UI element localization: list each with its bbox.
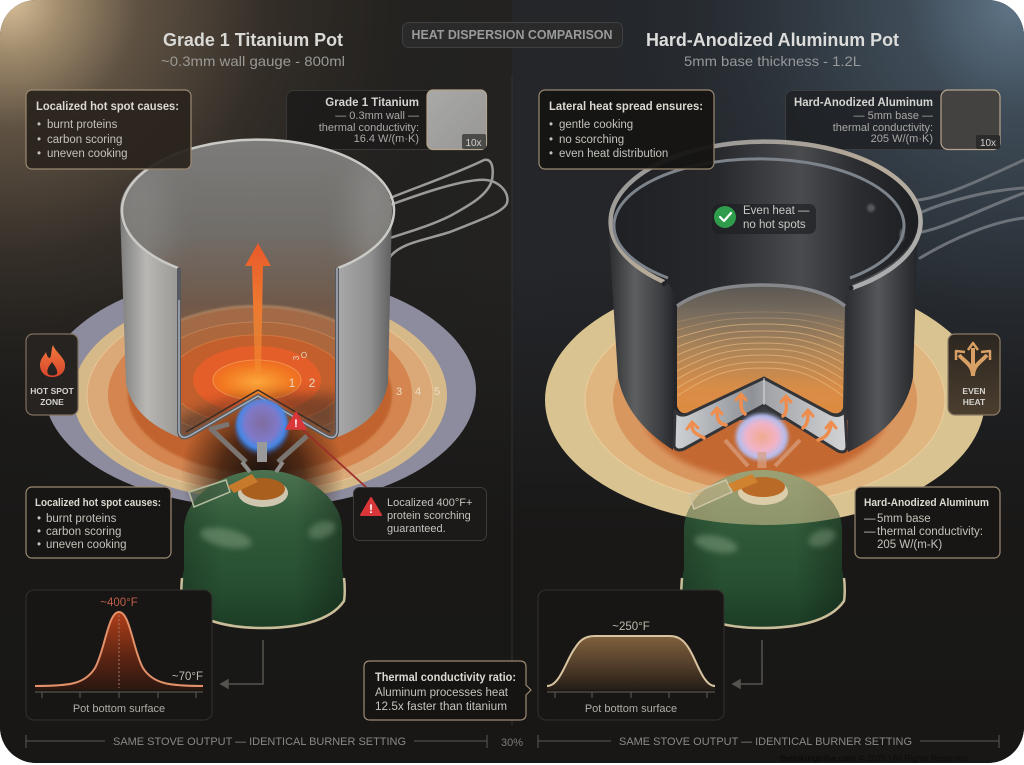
callout: conductivity ratio: Aluminum processes heat [375,687,509,699]
even-heat note: Even heat — [743,205,810,217]
callout: aluminum specs: — [864,513,876,525]
material card: titanium: 10x [465,138,482,149]
pot walls [608,220,675,450]
callout: localized hot spot top: uneven cooking [47,148,128,160]
callout: localized hot spot top: • [37,148,41,160]
chart: aluminum temperature profile [538,590,724,720]
callout: aluminum specs [855,487,1000,558]
callout: aluminum specs: 5mm base [877,513,931,525]
badge: even heat [948,334,1000,415]
canister body [681,470,845,628]
icon: warning triangle [361,498,381,515]
pot: titanium [110,135,507,454]
pot handle [918,160,1024,258]
callout: lateral heat spread: even heat distribution [559,148,668,160]
even-heat note [712,204,816,234]
badge: hot spot zone: ZONE [40,397,64,407]
stove legs [211,424,307,462]
stove and canister: titanium [181,399,345,628]
callout: lateral heat spread: • [549,134,553,146]
pot interior [120,140,392,436]
footer: same stove output right: SAME STOVE OUTPUT — IDENTICAL BURNER SETTING [619,736,912,748]
callout: localized hot spot top: • [37,119,41,131]
callout: conductivity ratio: Thermal conductivity ratio: [375,672,516,684]
ring numbers: 1 [289,376,296,390]
flame [734,412,790,462]
callout: localized hot spot top: • [37,134,41,146]
ring numbers: 2 [309,376,316,390]
even-heat note: no hot spots [743,219,806,231]
title: aluminum: Hard-Anodized Aluminum Pot [646,30,899,50]
chart: aluminum temperature profile: ~250°F [612,621,650,633]
callout: aluminum specs: Hard-Anodized Aluminum [864,497,989,509]
callout: scorching warning [354,488,486,540]
translucent halo over canister [686,470,840,525]
title: aluminum [646,30,899,69]
icon: flame [40,345,65,377]
heat arrow [245,243,271,372]
footer: same stove output left: SAME STOVE OUTPUT — IDENTICAL BURNER SETTING [113,736,406,748]
lateral heat arrows [687,394,836,440]
pot section interior with heat lines [675,283,847,420]
heat halo: aluminum [545,275,985,525]
chart: titanium temperature profile [26,590,212,720]
ring numbers outside pot [396,386,440,398]
chart: titanium temperature profile: Pot bottom surface [73,703,165,715]
footer: percentage: 30% [501,737,523,749]
material card: aluminum: 205 W/(m·K) [871,133,933,145]
callout: localized hot spot lower: uneven cooking [46,539,127,551]
rim and base section [122,140,394,268]
ring numbers: 3 [292,355,301,360]
callout: lateral heat spread: no scorching [559,134,624,146]
callout: aluminum specs: — [864,526,876,538]
callout: localized hot spot top [26,90,191,169]
connector arrow: titanium [221,640,263,688]
chart: titanium temperature profile: ~400°F [100,597,138,609]
material card: aluminum: — 5mm base — [854,110,933,122]
callout: lateral heat spread: gentle cooking [559,119,633,131]
pot: aluminum [608,140,1024,452]
callout: aluminum specs: thermal conductivity: [877,526,983,538]
material card: aluminum: 10x [980,138,996,149]
badge: hot spot zone [26,334,78,415]
callout: localized hot spot lower [26,487,171,558]
rim [611,142,921,288]
callout: scorching warning: protein scorching [387,510,471,522]
material card: aluminum: thermal conductivity: [833,122,933,134]
heading badge: HEAT DISPERSION COMPARISON [412,28,612,42]
badge: hot spot zone: HOT SPOT [30,386,75,396]
callout: scorching warning: ! [369,502,373,516]
pot walls [120,210,178,437]
callout: localized hot spot lower: carbon scoring [46,526,121,538]
callout: lateral heat spread: • [549,119,553,131]
thick base section [674,378,847,452]
callout: localized hot spot top: burnt proteins [47,119,118,131]
ring numbers [289,351,316,390]
callout: conductivity ratio [364,661,531,720]
callout: localized hot spot lower: Localized hot spot causes: [35,497,161,509]
material card: titanium: — 0.3mm wall — [335,110,419,122]
callout: lateral heat spread [539,90,714,169]
ring numbers: O [301,351,307,360]
callout: localized hot spot top: carbon scoring [47,134,122,146]
callout: localized hot spot lower: • [37,539,41,551]
connector arrow: aluminum [733,640,762,688]
material card: aluminum [786,90,1000,150]
title: titanium: Grade 1 Titanium Pot [163,30,343,50]
pot interior back wall [608,140,918,300]
material card: titanium [286,90,486,150]
canister body [181,470,345,628]
ring numbers outside pot: 5 [434,386,440,398]
callout: lateral heat spread: • [549,148,553,160]
badge: even heat: EVEN [962,386,986,396]
footer: same stove output left [26,735,487,748]
callout: lateral heat spread: Lateral heat spread ensures: [549,101,703,113]
watermark: thehikingtribe.com © 2025 | All Rights Reserved [780,753,967,763]
material card: titanium: Grade 1 Titanium [325,97,419,109]
ring numbers outside pot: 4 [415,386,421,398]
chart: aluminum temperature profile: Pot bottom surface [585,703,677,715]
icon: diverging arrows [956,343,990,376]
material card: aluminum: Hard-Anodized Aluminum [794,97,933,109]
footer: same stove output right [538,735,999,748]
valve tag [189,480,230,507]
heat halo: titanium [44,272,476,557]
valve [738,479,788,505]
callout: conductivity ratio: 12.5x faster than titanium [375,701,507,713]
title: titanium [161,30,345,69]
inner lip [677,285,845,306]
warning marker and leader line [286,412,367,488]
callout: localized hot spot lower: • [37,513,41,525]
callout: aluminum specs: 205 W/(m-K) [877,539,942,551]
callout: localized hot spot lower: • [37,526,41,538]
chart: titanium temperature profile: ~70°F [172,671,203,683]
title: aluminum: 5mm base thickness - 1.2L [684,53,861,69]
stove legs [725,440,800,468]
callout: localized hot spot top: Localized hot spot causes: [36,101,179,113]
flame [235,399,289,457]
material card: titanium: thermal conductivity: [319,122,419,134]
callout: scorching warning: Localized 400°F+ [387,497,472,509]
title: titanium: ~0.3mm wall gauge - 800ml [161,53,345,69]
callout: localized hot spot lower: burnt proteins [46,513,117,525]
valve tag [689,480,732,509]
warning marker and leader line: ! [294,418,298,430]
ring numbers outside pot: 3 [396,386,402,398]
pot handle [390,160,507,257]
heading badge [402,22,622,48]
badge: even heat: HEAT [963,397,986,407]
stove and canister: aluminum [680,411,846,630]
callout: scorching warning: guaranteed. [387,523,446,535]
material card: titanium: 16.4 W/(m·K) [354,133,419,145]
valve [238,479,288,507]
